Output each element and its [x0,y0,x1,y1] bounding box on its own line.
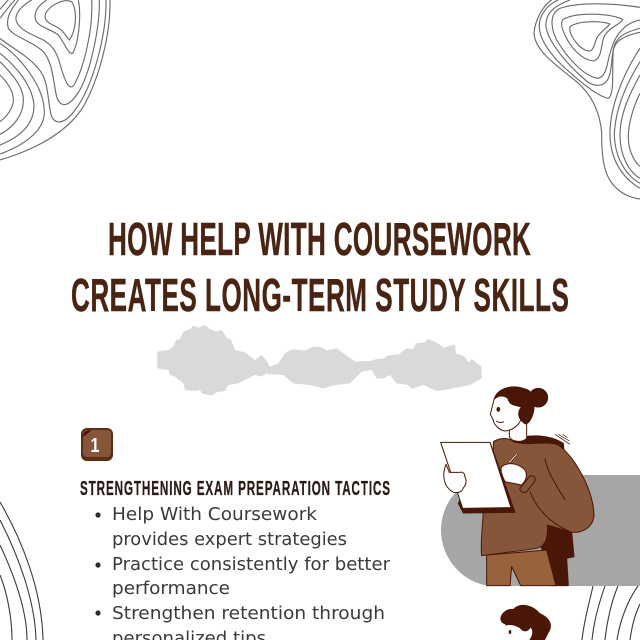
title [71,213,569,321]
left hand [444,464,466,493]
eye and mouth [497,407,500,411]
bullet list: Strengthen retention through [112,604,385,624]
section heading: STRENGTHENING EXAM PREPARATION TACTICS [80,477,390,500]
hair [500,605,551,640]
number badge: 1 [91,434,99,456]
hair [494,387,534,424]
contour decoration: top right [534,0,640,199]
sweater [481,439,594,556]
cuff [520,476,535,492]
bullet list [95,505,391,640]
illustration: student with clipboard [441,387,594,586]
right hand with pen [501,464,526,485]
motion marks [555,434,570,444]
face [504,625,532,640]
clipboard [441,442,511,508]
title: HOW HELP WITH COURSEWORK [108,213,531,265]
contour decoration: top left [0,0,110,160]
contour decoration: bottom right [582,586,640,640]
face [490,394,523,431]
title: CREATES LONG-TERM STUDY SKILLS [71,269,569,321]
bullet list: provides expert strategies [112,530,347,550]
clipboard shadow [458,442,515,513]
number badge [81,428,113,461]
dark backpack [513,436,574,586]
neck [509,418,527,441]
hair bun [529,388,548,407]
bullet list: Practice consistently for better [112,555,391,575]
bullet list: performance [112,579,230,599]
grey pill background [441,475,640,586]
audio waveform decoration [157,325,482,396]
contour decoration: bottom left [0,502,43,640]
eye [509,630,511,634]
bullet list: Help With Coursework [112,505,318,525]
illustration: second student head [500,605,551,640]
trousers [487,550,556,586]
